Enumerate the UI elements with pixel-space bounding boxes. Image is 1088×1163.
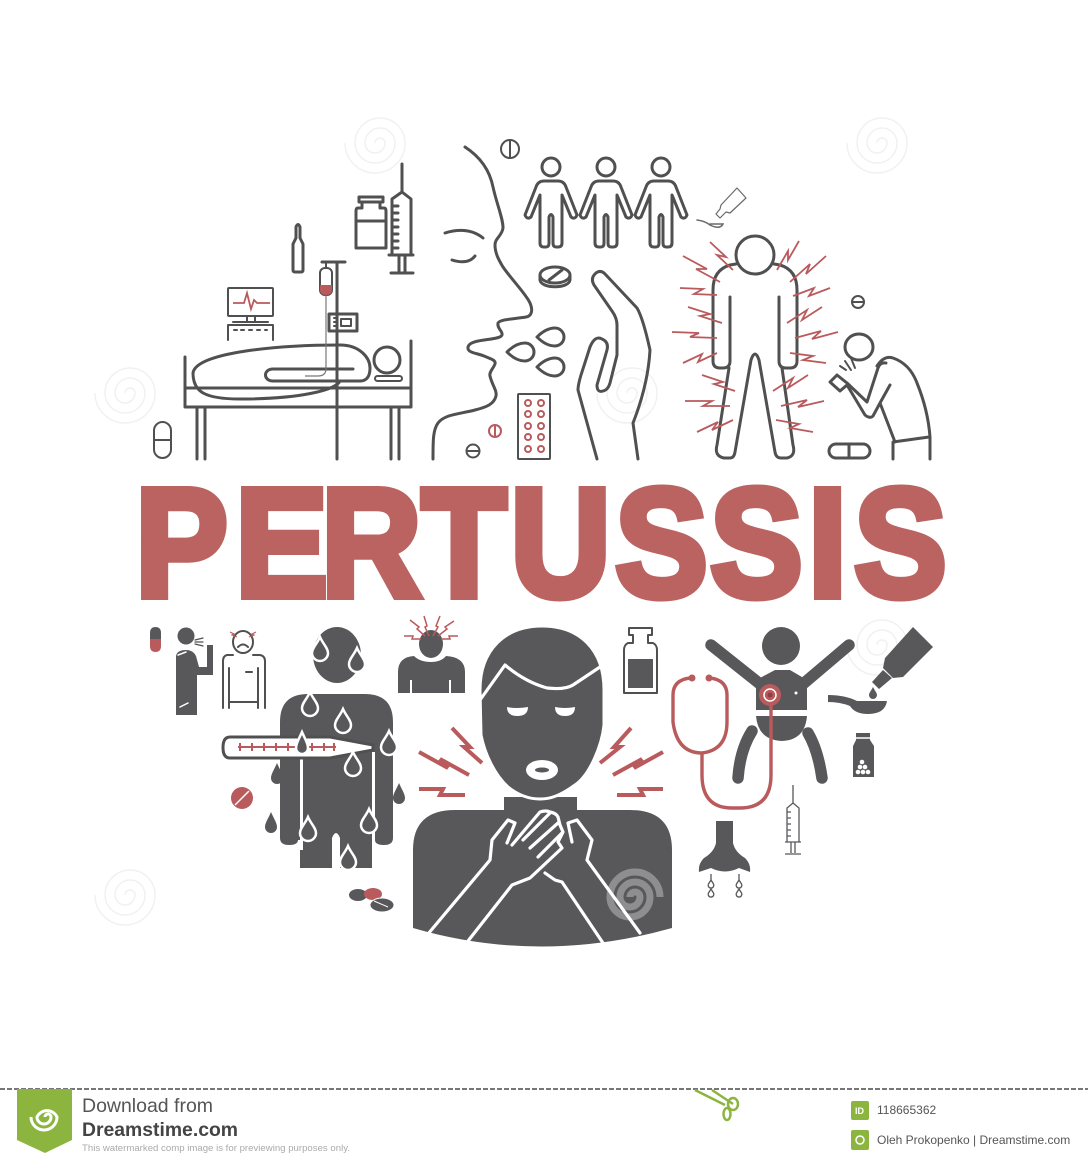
icon: cough droplets bbox=[507, 328, 564, 376]
icon: small pill bbox=[466, 444, 480, 458]
illustration: main figure holding throat bbox=[413, 626, 672, 946]
footer: author credit bbox=[851, 1130, 1070, 1150]
icon: pill outline top bbox=[501, 140, 519, 158]
footer: author credit: Oleh Prokopenko | Dreamstime.com bbox=[877, 1133, 1070, 1147]
thermometer bbox=[223, 737, 373, 758]
icon: coughing person outline bbox=[830, 334, 930, 459]
illustration: body with pain lightning bbox=[672, 236, 838, 458]
icon: medicine vial bbox=[356, 197, 386, 248]
footer: download text: This watermarked comp image is for previewing purposes only. bbox=[82, 1143, 350, 1154]
footer: download badge bbox=[17, 1089, 72, 1153]
icon: vial with liquid bbox=[624, 628, 657, 693]
footer: download text bbox=[82, 1095, 350, 1154]
illustration: baby with stethoscope bbox=[673, 627, 849, 808]
icon: ampoule bbox=[293, 224, 303, 272]
illustration: face profile coughing bbox=[433, 147, 532, 459]
title: PERTUSSIS bbox=[135, 457, 947, 630]
icon: small pill right bbox=[852, 296, 864, 308]
hands on throat bbox=[428, 811, 640, 943]
footer: download text: Download from bbox=[82, 1095, 213, 1117]
footer: download text: Dreamstime.com bbox=[82, 1119, 238, 1141]
icon: tablet bbox=[540, 267, 570, 287]
icon: red and dark capsule bbox=[150, 627, 161, 652]
icon: pile of pills bbox=[349, 888, 394, 912]
icon: heart monitor bbox=[228, 288, 273, 340]
icon: headache person bbox=[398, 616, 465, 693]
icon: medicine bottle and spoon outline bbox=[697, 188, 746, 227]
icon: medicine bottle pouring on spoon bbox=[828, 627, 933, 714]
illustration: sweating man with thermometer bbox=[223, 627, 405, 870]
icon: pain lightning right bbox=[600, 728, 663, 795]
icon: sick person outline bbox=[223, 631, 265, 708]
icon: red pill bbox=[489, 425, 501, 437]
icon: hand covering bbox=[578, 271, 650, 459]
icon: capsule outline right bbox=[829, 444, 870, 458]
footer: image ID: ID bbox=[855, 1106, 865, 1116]
icon: red tablet bbox=[231, 787, 253, 809]
sweat drops bbox=[265, 637, 405, 870]
illustration: hospital bed with patient bbox=[185, 262, 411, 459]
icon: syringe large bbox=[389, 164, 413, 273]
icon: three people outlines bbox=[525, 158, 687, 247]
icon: blister pack bbox=[518, 394, 550, 459]
icon: pain lightning left bbox=[419, 728, 482, 795]
icon: runny nose bbox=[699, 821, 750, 897]
footer: scissors bbox=[695, 1090, 738, 1120]
footer: image ID: 118665362 bbox=[877, 1103, 936, 1117]
icon: pill bottle bbox=[853, 733, 874, 777]
icon: small person coughing solid bbox=[176, 628, 213, 715]
stethoscope bbox=[673, 674, 781, 808]
mouth bbox=[526, 760, 558, 780]
icon: IV drip and pump bbox=[305, 262, 357, 376]
eyes bbox=[507, 707, 575, 716]
icon: syringe small bbox=[785, 785, 801, 854]
footer: image ID bbox=[851, 1101, 936, 1120]
footer: dashed cut line bbox=[0, 1088, 1088, 1090]
icon: capsule outline left bbox=[154, 422, 171, 458]
